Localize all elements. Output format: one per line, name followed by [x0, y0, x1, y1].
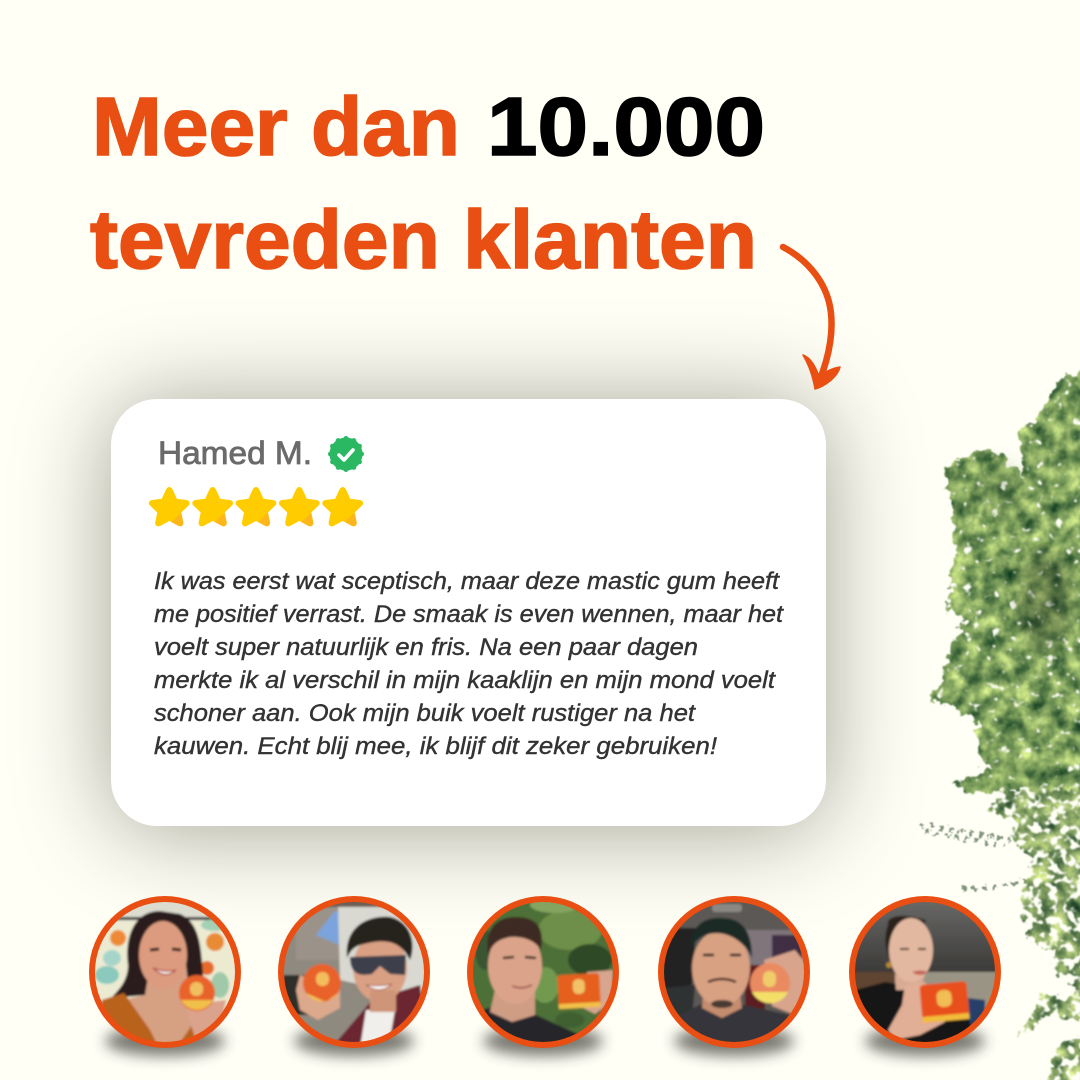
customer photo 3	[467, 896, 620, 1056]
customer photo 5	[845, 896, 1001, 1056]
review text: Ik was eerst wat sceptisch, maar deze mastic gum heeft	[154, 568, 780, 595]
reviewer name: Hamed M.	[158, 435, 312, 471]
title line 1 orange: Meer dan	[92, 80, 460, 173]
title	[90, 80, 765, 286]
review text: merkte ik al verschil in mijn kaaklijn en mijn mond voelt	[154, 667, 776, 694]
customer photo 4	[658, 896, 810, 1056]
customer photo 2	[278, 895, 430, 1056]
customer photo 1	[89, 895, 241, 1056]
review text: schoner aan. Ook mijn buik voelt rustiger na het	[154, 700, 696, 727]
title line 2: tevreden klanten	[90, 193, 757, 286]
review text: kauwen. Echt blij mee, ik blijf dit zeker gebruiken!	[154, 733, 717, 760]
review text: me positief verrast. De smaak is even wennen, maar het	[154, 601, 784, 628]
arrow pointing to review card	[783, 247, 840, 389]
title number: 10.000	[487, 80, 765, 173]
review text	[154, 568, 784, 760]
review card	[111, 399, 826, 826]
five star rating	[149, 487, 363, 526]
icon: verified badge	[328, 436, 364, 472]
review text: voelt super natuurlijk en fris. Na een paar dagen	[154, 634, 698, 661]
